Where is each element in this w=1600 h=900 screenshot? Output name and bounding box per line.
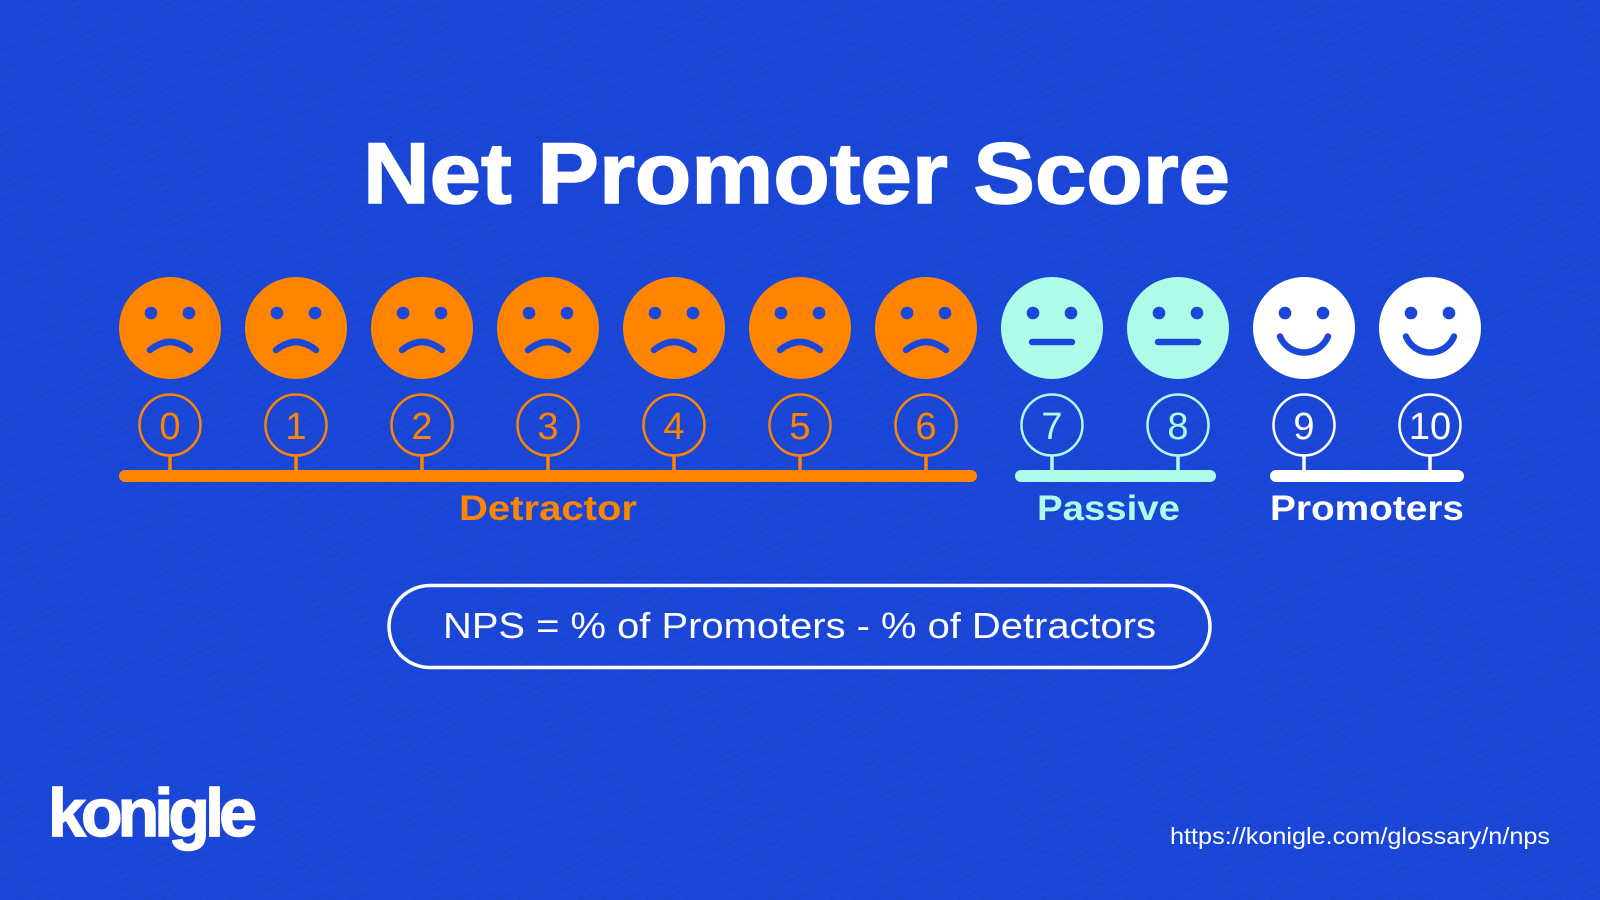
score numbers 0 to 6: 4: [663, 406, 685, 448]
score numbers 9 and 10: 9: [1293, 406, 1315, 448]
score numbers 9 and 10: 10: [1409, 406, 1451, 448]
logo: konigle: konigle: [48, 775, 257, 851]
icon: sad face 4: [623, 277, 725, 379]
score badges 0 to 6: [140, 394, 956, 471]
icon: happy face 10: [1379, 277, 1481, 379]
icon: sad face 0: [119, 277, 221, 379]
icon: happy face 9: [1253, 277, 1355, 379]
score numbers 7 and 8: 8: [1167, 406, 1189, 448]
detractor label: Detractor: [459, 489, 637, 528]
score numbers 7 and 8: 7: [1041, 406, 1063, 448]
score numbers 0 to 6: 6: [915, 406, 937, 448]
score numbers 7 and 8: [1041, 406, 1189, 448]
score numbers 0 to 6: 3: [537, 406, 559, 448]
detractor bar: [119, 470, 977, 482]
score numbers 0 to 6: 1: [285, 406, 307, 448]
score numbers 0 to 6: [159, 406, 937, 448]
panel: detractor scale: [119, 277, 977, 528]
score badges 9 and 10: [1274, 394, 1460, 471]
icon: sad face 3: [497, 277, 599, 379]
promoters bar: [1270, 470, 1464, 482]
score numbers 0 to 6: 0: [159, 406, 181, 448]
promoters label: Promoters: [1270, 489, 1464, 528]
icon: sad face 2: [371, 277, 473, 379]
passive label: Passive: [1037, 489, 1180, 528]
icon: sad face 6: [875, 277, 977, 379]
title: Net Promoter Score: [363, 126, 1230, 222]
icon: neutral face 7: [1001, 277, 1103, 379]
score numbers 9 and 10: [1293, 406, 1451, 448]
source URL: https://konigle.com/glossary/n/nps: [1170, 823, 1550, 849]
passive bar: [1015, 470, 1216, 482]
score numbers 0 to 6: 2: [411, 406, 433, 448]
panel: promoters scale: [1253, 277, 1481, 528]
icon: neutral face 8: [1127, 277, 1229, 379]
callout: NPS formula: NPS = % of Promoters - % of Detractors: [443, 605, 1156, 646]
score numbers 0 to 6: 5: [789, 406, 811, 448]
score badges 7 and 8: [1022, 394, 1208, 471]
icon: sad face 1: [245, 277, 347, 379]
callout: NPS formula: [389, 586, 1210, 668]
panel: passive scale: [1001, 277, 1229, 528]
icon: sad face 5: [749, 277, 851, 379]
